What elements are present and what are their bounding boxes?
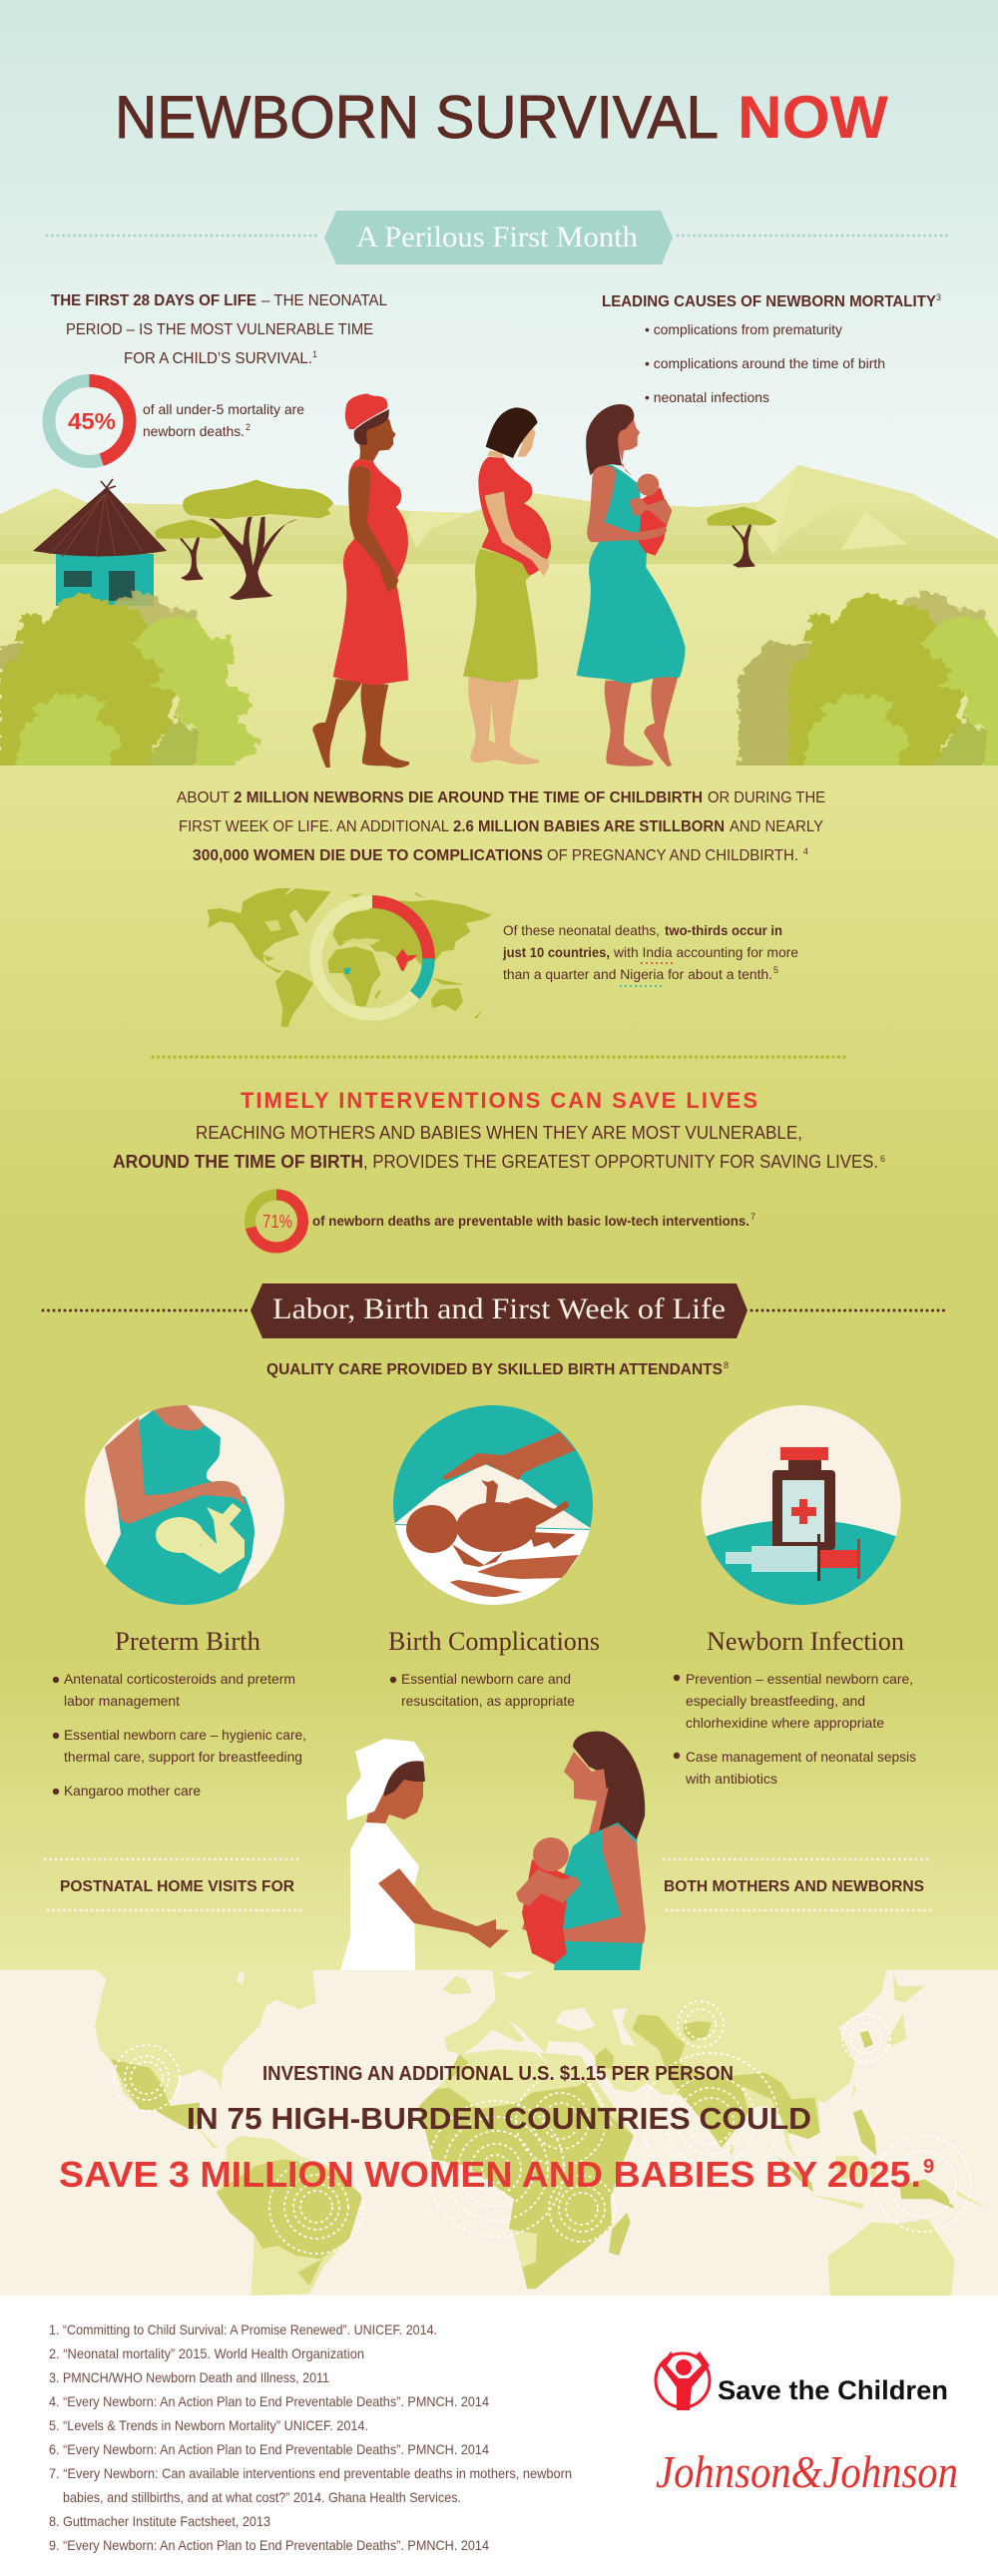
list: preterm birth: labor management <box>64 1693 180 1709</box>
donut chart: 45% <box>49 381 130 461</box>
text block: first 28 days: THE FIRST 28 DAYS OF LIFE <box>51 292 256 309</box>
text block: two-thirds in 10 countries: with India accounting for more <box>613 944 798 960</box>
icon: newborn infection <box>699 1405 903 1607</box>
text block: reaching mothers and babies: REACHING MOTHERS AND BABIES WHEN THEY ARE MOST VULNERABLE, <box>196 1123 802 1143</box>
text block: two-thirds in 10 countries <box>502 922 798 982</box>
text block: 71% caption: 7 <box>750 1212 755 1222</box>
references: 7. “Every Newborn: Can available interventions end preventable deaths in mothers, newborn <box>49 2465 572 2481</box>
text block: 45% caption: of all under-5 mortality are <box>143 401 304 417</box>
dashed rings: high-burden regions <box>114 2001 971 2254</box>
illustration: small tree left <box>155 520 225 581</box>
background: sky <box>0 0 998 564</box>
label: Newborn Infection: Newborn Infection <box>707 1627 904 1656</box>
figure: pregnant woman in red top and olive skirt <box>463 407 551 765</box>
text block: save 3 million: SAVE 3 MILLION WOMEN AND BABIES BY 2025. <box>59 2154 921 2195</box>
text block: 2 million newborns: FIRST WEEK OF LIFE. AN ADDITIONAL <box>179 818 449 835</box>
figure: mother in teal dress holding baby <box>577 404 686 767</box>
text block: 2 million newborns: 2.6 MILLION BABIES ARE STILLBORN <box>453 818 725 835</box>
icon: birth complications <box>393 1405 593 1607</box>
label: Birth Complications: Birth Complications <box>388 1627 600 1656</box>
donut chart: 45%: 45% <box>68 408 116 434</box>
text block: two-thirds in 10 countries: than a quarter and Nigeria for about a tenth. <box>503 966 772 982</box>
heading: quality care: 8 <box>724 1360 729 1370</box>
illustration: small tree right <box>707 507 776 568</box>
text block: two-thirds in 10 countries: two-thirds occur in <box>665 922 782 938</box>
label: postnatal home visits for: POSTNATAL HOME VISITS FOR <box>60 1878 294 1895</box>
text block: reaching mothers and babies: , PROVIDES THE GREATEST OPPORTUNITY FOR SAVING LIVES. <box>363 1152 878 1172</box>
title: NOW <box>738 84 888 151</box>
references: 2. “Neonatal mortality” 2015. World Health Organization <box>49 2345 364 2361</box>
heading: quality care: QUALITY CARE PROVIDED BY SKILLED BIRTH ATTENDANTS <box>266 1361 723 1378</box>
text block: leading causes: LEADING CAUSES OF NEWBORN MORTALITY <box>602 293 936 310</box>
list: preterm birth <box>53 1671 306 1799</box>
list: birth complications <box>390 1671 575 1709</box>
text block: 2 million newborns: AND NEARLY <box>730 818 823 835</box>
text block: first 28 days: – THE NEONATAL <box>261 292 387 309</box>
text block: reaching mothers and babies <box>113 1123 885 1172</box>
list: newborn infection: chlorhexidine where appropriate <box>686 1715 884 1731</box>
donut chart: 71% <box>250 1195 303 1248</box>
text block: 45% caption <box>143 401 304 439</box>
references <box>49 2321 572 2553</box>
text block: reaching mothers and babies: 6 <box>880 1154 885 1164</box>
illustration: house <box>33 479 167 606</box>
logo: Johnson & Johnson: Johnson&Johnson <box>656 2446 958 2497</box>
text block: 2 million newborns: OF PREGNANCY AND CHILDBIRTH. <box>547 847 798 864</box>
text block: 71% caption: of newborn deaths are preventable with basic low-tech interventions. <box>312 1213 749 1229</box>
label: Preterm Birth: Preterm Birth <box>115 1627 260 1656</box>
list: preterm birth: Essential newborn care – hygienic care, <box>64 1727 306 1743</box>
text block: two-thirds in 10 countries: just 10 countries, <box>502 944 610 960</box>
illustration: right bushes <box>739 592 998 785</box>
section banner: A Perilous First Month <box>324 211 673 264</box>
section banner: Labor, Birth and First Week of Life <box>250 1284 748 1338</box>
world map: investment section <box>0 1970 998 2296</box>
list: newborn infection <box>674 1671 916 1787</box>
text block: 2 million newborns: 300,000 WOMEN DIE DUE TO COMPLICATIONS <box>193 847 543 864</box>
list: birth complications: resuscitation, as appropriate <box>401 1693 575 1709</box>
label: both mothers and newborns: BOTH MOTHERS AND NEWBORNS <box>664 1878 924 1895</box>
section banner: A Perilous First Month: A Perilous First Month <box>356 221 638 254</box>
text block: leading causes: • neonatal infections <box>645 389 769 405</box>
text block: save 3 million: 9 <box>923 2156 934 2178</box>
text block: 2 million newborns: 4 <box>803 846 808 856</box>
logo: Save the Children: Save the Children <box>718 2375 948 2405</box>
illustration: left bushes <box>0 592 257 785</box>
figure: nurse in white with headscarf <box>340 1739 509 1970</box>
list: newborn infection: Case management of neonatal sepsis <box>686 1749 916 1765</box>
list: newborn infection: with antibiotics <box>685 1771 777 1787</box>
list: preterm birth: Kangaroo mother care <box>64 1783 201 1799</box>
references: babies, and stillbirths, and at what cost?” 2014. Ghana Health Services. <box>63 2489 461 2505</box>
references: 6. “Every Newborn: An Action Plan to End Preventable Deaths”. PMNCH. 2014 <box>49 2441 489 2457</box>
list: newborn infection: Prevention – essential newborn care, <box>686 1671 913 1687</box>
text block: leading causes: • complications from prematurity <box>645 321 842 337</box>
world map with India and Nigeria ring chart <box>207 888 492 1027</box>
text block: first 28 days <box>51 292 387 367</box>
section banner: Labor, Birth and First Week of Life: Labor, Birth and First Week of Life <box>272 1292 726 1325</box>
list: newborn infection: especially breastfeeding, and <box>686 1693 865 1709</box>
text block: leading causes: 3 <box>936 292 941 302</box>
logo: Save the Children <box>656 2351 948 2410</box>
text block: 2 million newborns <box>177 789 825 864</box>
text block: investing additional: INVESTING AN ADDITIONAL U.S. $1.15 PER PERSON <box>262 2063 734 2085</box>
title: NEWBORN SURVIVAL <box>115 84 719 151</box>
text block: 75 high-burden countries: IN 75 HIGH-BURDEN COUNTRIES COULD <box>187 2101 811 2136</box>
text block: 2 million newborns: 2 MILLION NEWBORNS DIE AROUND THE TIME OF CHILDBIRTH <box>234 789 703 806</box>
text block: 2 million newborns: OR DURING THE <box>708 789 825 806</box>
text block: two-thirds in 10 countries: Of these neonatal deaths, <box>503 922 660 938</box>
references: 5. “Levels & Trends in Newborn Mortality” UNICEF. 2014. <box>49 2417 368 2433</box>
text block: first 28 days: 1 <box>312 349 317 359</box>
background: hills <box>0 465 998 567</box>
text block: reaching mothers and babies: AROUND THE TIME OF BIRTH <box>113 1152 363 1172</box>
illustration: large tree <box>183 480 333 600</box>
list: birth complications: Essential newborn care and <box>401 1671 571 1687</box>
figure: mother holding newborn <box>516 1732 646 1970</box>
heading: timely interventions: TIMELY INTERVENTIONS CAN SAVE LIVES <box>241 1088 757 1113</box>
text block: 45% caption: newborn deaths. <box>143 423 245 439</box>
references: 4. “Every Newborn: An Action Plan to End Preventable Deaths”. PMNCH. 2014 <box>49 2393 489 2409</box>
text block: first 28 days: FOR A CHILD’S SURVIVAL. <box>124 350 312 367</box>
donut chart: 71%: 71% <box>262 1212 292 1232</box>
text block: two-thirds in 10 countries: 5 <box>773 965 778 975</box>
references: 8. Guttmacher Institute Factsheet, 2013 <box>49 2513 270 2529</box>
icon: preterm birth <box>85 1402 284 1612</box>
background: ground gradient <box>0 564 998 1970</box>
text block: 2 million newborns: ABOUT <box>177 789 230 806</box>
references: 3. PMNCH/WHO Newborn Death and Illness, 2011 <box>49 2369 329 2385</box>
figure: pregnant woman in red dress and headwrap <box>312 393 409 768</box>
text block: first 28 days: PERIOD – IS THE MOST VULNERABLE TIME <box>66 321 373 338</box>
footer background <box>0 2296 998 2576</box>
list: preterm birth: Antenatal corticosteroids and preterm <box>64 1671 295 1687</box>
text block: leading causes: • complications around the time of birth <box>645 355 885 371</box>
text block: 45% caption: 2 <box>246 422 250 432</box>
references: 1. “Committing to Child Survival: A Promise Renewed”. UNICEF. 2014. <box>49 2321 437 2337</box>
text block: leading causes <box>602 292 941 405</box>
references: 9. “Every Newborn: An Action Plan to End Preventable Deaths”. PMNCH. 2014 <box>49 2537 489 2553</box>
list: preterm birth: thermal care, support for breastfeeding <box>64 1749 302 1765</box>
